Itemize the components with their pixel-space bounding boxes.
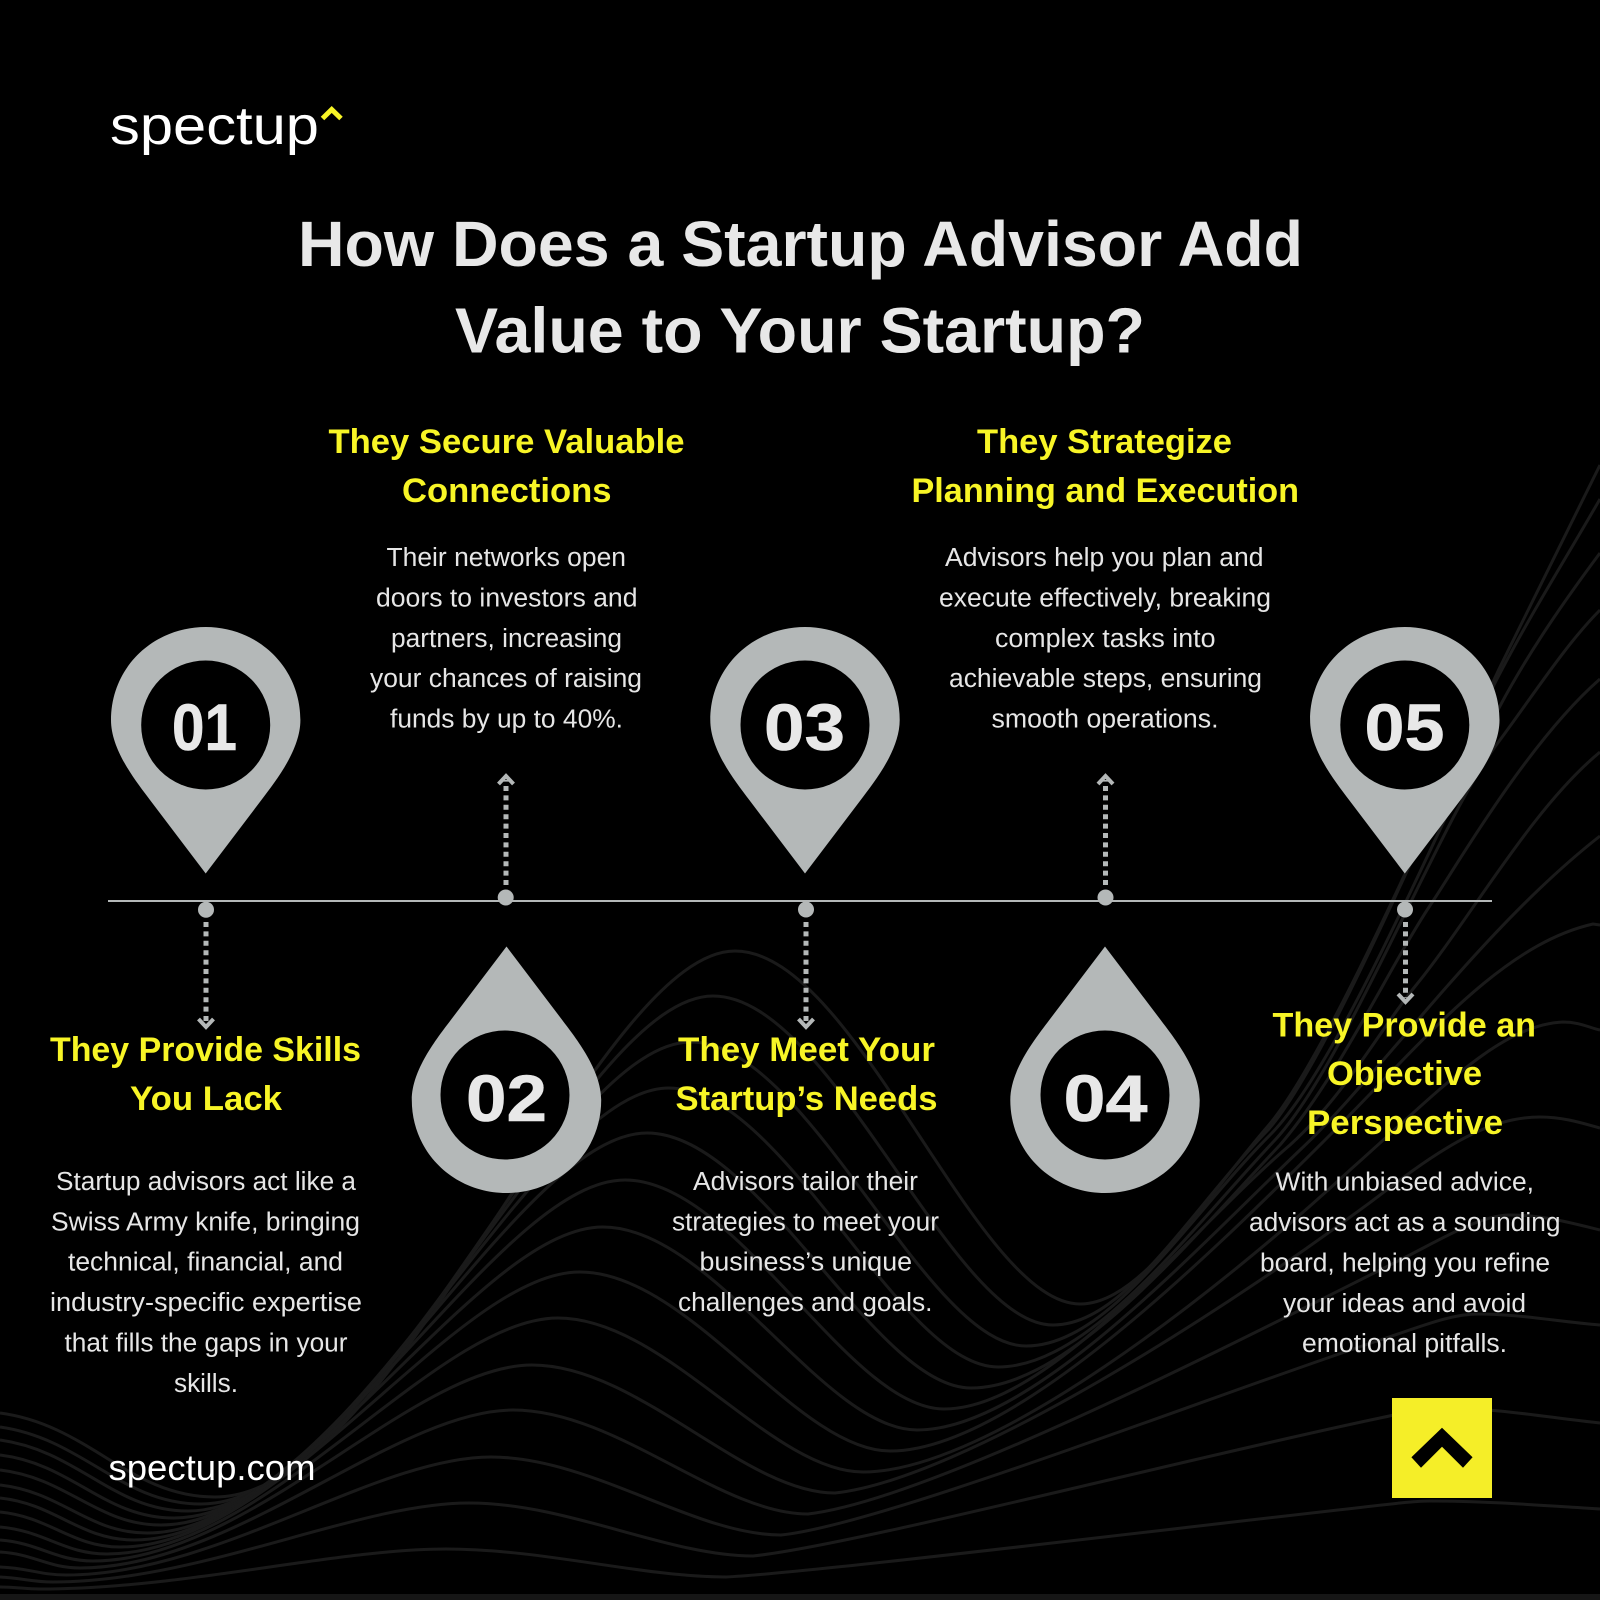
heading 03: They Meet Your <box>678 1031 935 1069</box>
body 02: your chances of raising <box>370 665 642 693</box>
step 02 text <box>328 423 684 734</box>
body 01: that fills the gaps in your <box>64 1330 348 1358</box>
step 05 text <box>1249 1006 1560 1358</box>
body 01: Swiss Army knife, bringing <box>51 1208 360 1236</box>
body 02: funds by up to 40%. <box>390 706 623 734</box>
title <box>298 208 1303 366</box>
body 03: business’s unique <box>700 1248 912 1276</box>
drop 02: 02 <box>466 1061 547 1135</box>
arrow 01 down <box>198 902 214 1027</box>
drop 02 <box>412 946 601 1193</box>
step 03 text <box>672 1031 940 1317</box>
arrow 05 down <box>1397 902 1413 1002</box>
body 01: technical, financial, and <box>68 1248 343 1276</box>
pin 01 <box>111 627 300 874</box>
body 03: Advisors tailor their <box>693 1168 919 1196</box>
background wave lines <box>0 465 1600 1600</box>
body 04: execute effectively, breaking <box>939 584 1271 612</box>
heading 03: Startup’s Needs <box>676 1080 938 1118</box>
body 05: advisors act as a sounding <box>1249 1209 1560 1237</box>
body 03 <box>672 1168 940 1317</box>
drop 04 <box>1010 946 1200 1193</box>
heading 05: They Provide an <box>1272 1006 1536 1044</box>
pin 03 <box>710 627 900 874</box>
pin 01: 01 <box>172 690 237 764</box>
pin 03: 03 <box>764 690 845 764</box>
heading 05 <box>1272 1006 1536 1142</box>
arrow 04 up <box>1098 776 1114 906</box>
body 05: With unbiased advice, <box>1276 1168 1534 1196</box>
body 05 <box>1249 1168 1560 1358</box>
body 05: board, helping you refine <box>1260 1250 1550 1278</box>
website: spectup.com: spectup.com <box>108 1447 316 1488</box>
heading 05: Perspective <box>1307 1104 1503 1142</box>
pin 05 <box>1310 627 1500 874</box>
step 01 text <box>50 1031 362 1398</box>
body 02: doors to investors and <box>376 584 638 612</box>
step 04 text <box>912 423 1299 734</box>
heading 04 <box>912 423 1299 510</box>
body 02 <box>370 544 642 734</box>
body 02: partners, increasing <box>391 625 622 653</box>
heading 02: Connections <box>402 472 612 510</box>
body 03: strategies to meet your <box>672 1208 940 1236</box>
body 02: Their networks open <box>386 544 626 572</box>
pin 05: 05 <box>1364 690 1444 764</box>
arrow 02 up <box>498 776 514 906</box>
heading 02: They Secure Valuable <box>328 423 684 461</box>
heading 04: Planning and Execution <box>912 472 1299 510</box>
body 04: achievable steps, ensuring <box>949 665 1262 693</box>
body 04: complex tasks into <box>995 625 1216 653</box>
heading 05: Objective <box>1327 1055 1482 1093</box>
heading 01: You Lack <box>130 1080 282 1118</box>
body 04 <box>939 544 1271 734</box>
heading 04: They Strategize <box>977 423 1232 461</box>
body 01 <box>50 1168 362 1398</box>
heading 01: They Provide Skills <box>50 1031 361 1069</box>
body 04: Advisors help you plan and <box>945 544 1264 572</box>
heading 01 <box>50 1031 361 1118</box>
body 03: challenges and goals. <box>678 1289 932 1317</box>
title: How Does a Startup Advisor Add <box>298 208 1303 280</box>
body 01: industry-specific expertise <box>50 1289 362 1317</box>
body 05: your ideas and avoid <box>1283 1290 1526 1318</box>
timeline axis <box>108 900 1492 902</box>
body 01: skills. <box>174 1370 238 1398</box>
logo: spectup: spectup <box>110 96 319 156</box>
body 05: emotional pitfalls. <box>1302 1330 1507 1358</box>
heading 03 <box>676 1031 938 1118</box>
title: Value to Your Startup? <box>455 294 1145 366</box>
body 01: Startup advisors act like a <box>56 1168 357 1196</box>
body 04: smooth operations. <box>992 706 1218 734</box>
drop 04: 04 <box>1064 1061 1148 1135</box>
heading 02 <box>328 423 684 510</box>
arrow 03 down <box>798 902 814 1027</box>
icon: yellow square with chevron <box>1392 1398 1492 1498</box>
